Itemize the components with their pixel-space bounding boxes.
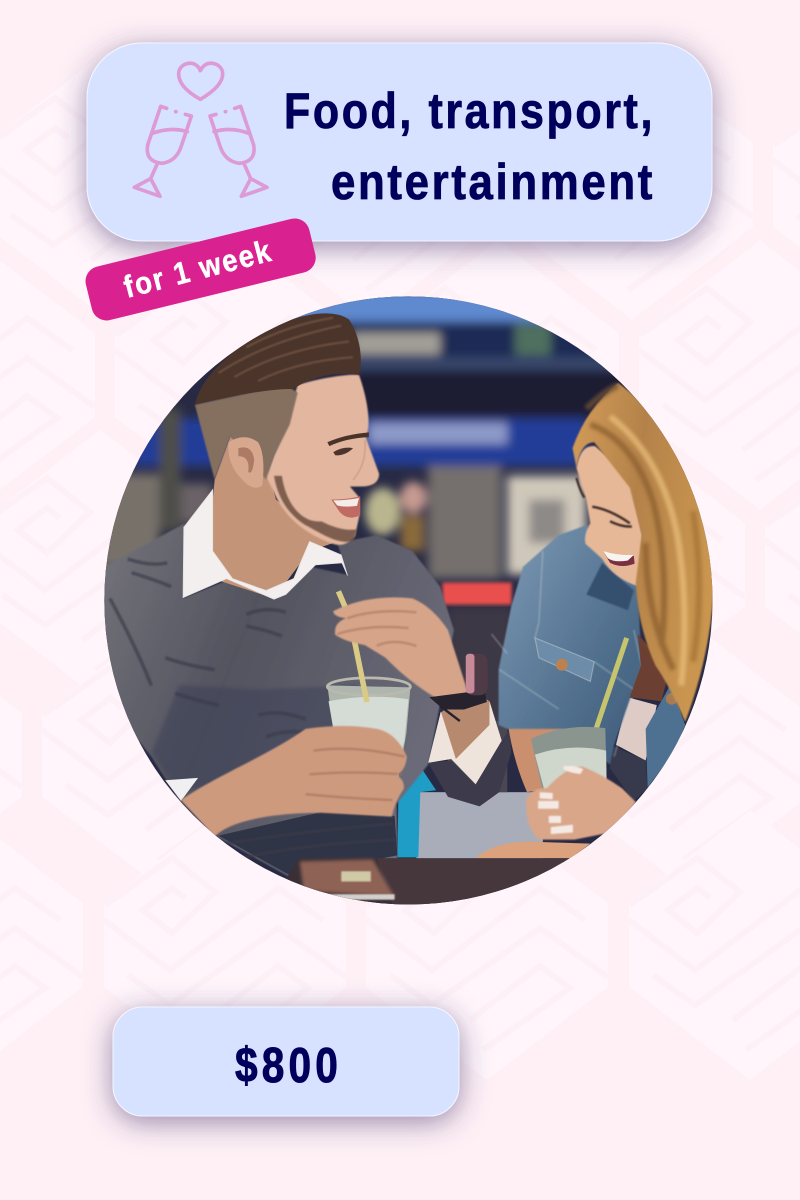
heading: entertainment: [331, 154, 655, 210]
man: [104, 313, 454, 877]
hair: [573, 383, 714, 722]
icon: clinking glasses with heart: [134, 63, 267, 196]
table and phone: [286, 857, 570, 904]
collar: [183, 490, 348, 599]
glass: [531, 726, 606, 789]
hands: [526, 766, 636, 840]
header panel: [87, 43, 712, 241]
top: [616, 697, 657, 761]
price panel: [113, 1007, 459, 1116]
woman: [491, 383, 714, 851]
arm: [508, 725, 565, 792]
watch: [432, 691, 486, 721]
badge: for 1 week: for 1 week: [120, 233, 276, 305]
denim jacket: [499, 525, 642, 764]
photo: couple with drinks in circle: [100, 290, 720, 911]
man's glass: [327, 591, 410, 800]
price value: $800: [235, 1039, 342, 1093]
badge: for 1 week: [82, 215, 319, 324]
neck shade: [630, 634, 669, 701]
hair side fade and top: [195, 385, 298, 480]
heading: Food, transport,: [284, 83, 655, 139]
man's hands and arms: [181, 597, 511, 836]
knee: [476, 842, 590, 858]
face: [576, 446, 643, 587]
straw: [594, 637, 630, 728]
neck: [209, 436, 333, 598]
blurred cafe background: [100, 290, 720, 910]
sweater: [104, 523, 454, 877]
cuff: [165, 778, 198, 801]
heading: [284, 83, 655, 210]
face: [266, 375, 379, 545]
eye, brow, mouth: [327, 432, 369, 446]
ear: [228, 437, 263, 488]
